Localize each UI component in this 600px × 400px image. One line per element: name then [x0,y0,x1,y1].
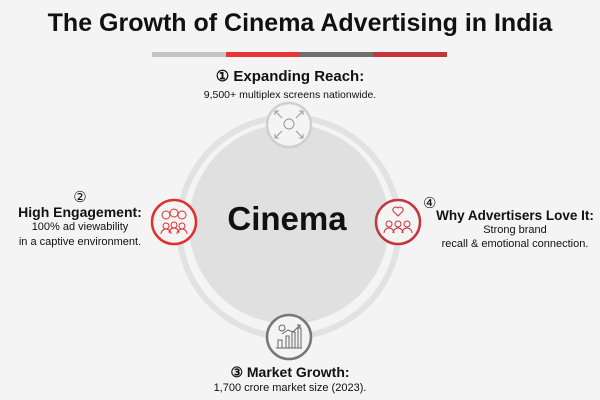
text: market growth [214,364,366,394]
text: high engagement: in a captive environment. [19,236,141,248]
text: high engagement: 100% ad viewability [32,221,128,233]
text: market growth: 1,700 crore market size (2023). [214,382,366,394]
text: market growth: ③ Market Growth: [230,364,350,380]
title underline [152,52,447,57]
icon: market growth [267,315,311,359]
text: why advertisers love it: ④ [423,195,436,212]
center disc: Cinema [227,200,347,237]
center disc [189,124,389,324]
text: high engagement: ② [73,189,87,206]
title: The Growth of Cinema Advertising in India [48,9,552,37]
text: recall & emotional connection. [442,238,588,250]
icon: advertisers love it [376,200,420,244]
text: expanding reach: ① Expanding Reach: [216,68,364,85]
text: expanding reach [204,68,376,101]
text: Strong brand [483,224,547,236]
icon: expanding reach [267,103,311,147]
text: high engagement: High Engagement: [18,204,142,220]
icon: high engagement [152,200,196,244]
text: expanding reach: 9,500+ multiplex screens nationwide. [204,89,376,101]
outer ring [179,117,399,337]
text: Why Advertisers Love It: [436,208,594,223]
text: high engagement [18,189,142,248]
